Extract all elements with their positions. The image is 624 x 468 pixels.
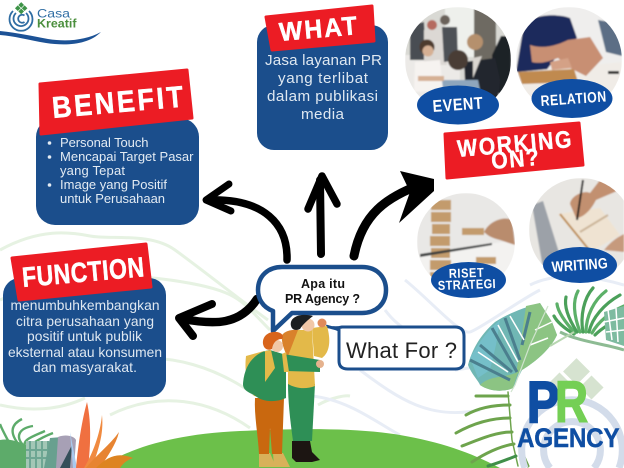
benefit list — [48, 135, 194, 206]
label: riset strategi — [431, 262, 506, 298]
traveller: man — [243, 332, 324, 467]
logo swoosh — [0, 31, 101, 44]
label: writing: WRITING — [551, 254, 608, 275]
label: event — [417, 86, 499, 124]
benefit list: Personal Touch — [60, 135, 148, 150]
logo wordmark — [37, 6, 78, 30]
company logo — [0, 2, 101, 44]
what description: dalam publikasi — [267, 88, 378, 105]
heading: benefit — [40, 70, 192, 134]
tropical palm top right — [550, 288, 624, 350]
heading: working on — [445, 123, 583, 178]
traveller: woman — [282, 315, 329, 462]
logo wordmark: Casa — [37, 6, 70, 20]
badge text: PR agency — [517, 370, 620, 453]
function description: eksternal atau konsumen — [8, 345, 162, 360]
benefit list: Mencapai Target Pasar — [60, 149, 194, 164]
badge text: PR agency: P — [527, 370, 559, 435]
photo: writing — [529, 178, 624, 268]
what description: yang terlibat — [278, 70, 369, 87]
white badge circle — [503, 357, 624, 468]
speech bubble: what for — [326, 326, 464, 369]
speech bubble: apa itu: Apa itu — [301, 277, 345, 291]
heading: function — [12, 244, 151, 300]
heading: function: FUNCTION — [21, 252, 145, 294]
label: riset strategi: STRATEGI — [438, 276, 496, 293]
function description: dan masyarakat. — [33, 360, 137, 375]
heading: what: WHAT — [278, 12, 359, 47]
green ground — [100, 429, 500, 468]
arrow: to benefit — [206, 184, 287, 260]
tropical plant bottom left — [0, 402, 133, 468]
illustration: two travellers — [243, 315, 329, 467]
photo: riset strategi — [417, 193, 515, 277]
heading: working on: ON? — [490, 144, 540, 174]
arrow: to function — [179, 299, 257, 336]
function description: positif untuk publik — [27, 329, 142, 344]
panel: benefit — [36, 118, 199, 225]
speech bubble: what for: What For ? — [346, 338, 457, 363]
label: relation — [532, 79, 612, 118]
speech bubble: apa itu: PR Agency ? — [285, 292, 360, 306]
arrow: to working on — [354, 171, 434, 256]
logo wordmark: Kreatif — [37, 16, 78, 30]
label: writing — [543, 247, 617, 283]
logo diamonds — [15, 2, 27, 14]
what description — [265, 52, 382, 123]
panel: function — [3, 278, 166, 397]
what description: media — [301, 106, 345, 123]
heading: benefit: BENEFIT — [51, 80, 185, 125]
function description: menumbuhkembangkan — [10, 298, 160, 313]
heading: working on: WORKING — [456, 126, 572, 162]
function description: citra perusahaan yang — [16, 314, 154, 329]
benefit list: Image yang Positif — [60, 177, 167, 192]
photo: event — [405, 7, 511, 98]
benefit list: untuk Perusahaan — [60, 191, 165, 206]
badge diamonds — [547, 358, 604, 400]
arrow: to what — [308, 176, 337, 254]
speech bubble: apa itu — [258, 267, 386, 331]
tropical palm bottom center — [456, 392, 528, 466]
benefit list: yang Tepat — [60, 163, 125, 178]
label: riset strategi: RISET — [449, 265, 485, 281]
arrow head: working on — [399, 171, 434, 223]
photo: relation — [516, 7, 622, 98]
what description: Jasa layanan PR — [265, 52, 382, 69]
badge text: PR agency: AGENCY — [517, 424, 620, 453]
label: relation: RELATION — [540, 88, 607, 109]
badge text: PR agency: R — [555, 370, 588, 435]
panel: what — [257, 25, 388, 150]
heading: what — [266, 6, 374, 50]
function description — [8, 298, 162, 375]
tropical monstera leaf — [468, 303, 557, 392]
label: event: EVENT — [432, 95, 484, 116]
badge logo watermark — [522, 400, 622, 468]
logo mark — [10, 11, 32, 31]
